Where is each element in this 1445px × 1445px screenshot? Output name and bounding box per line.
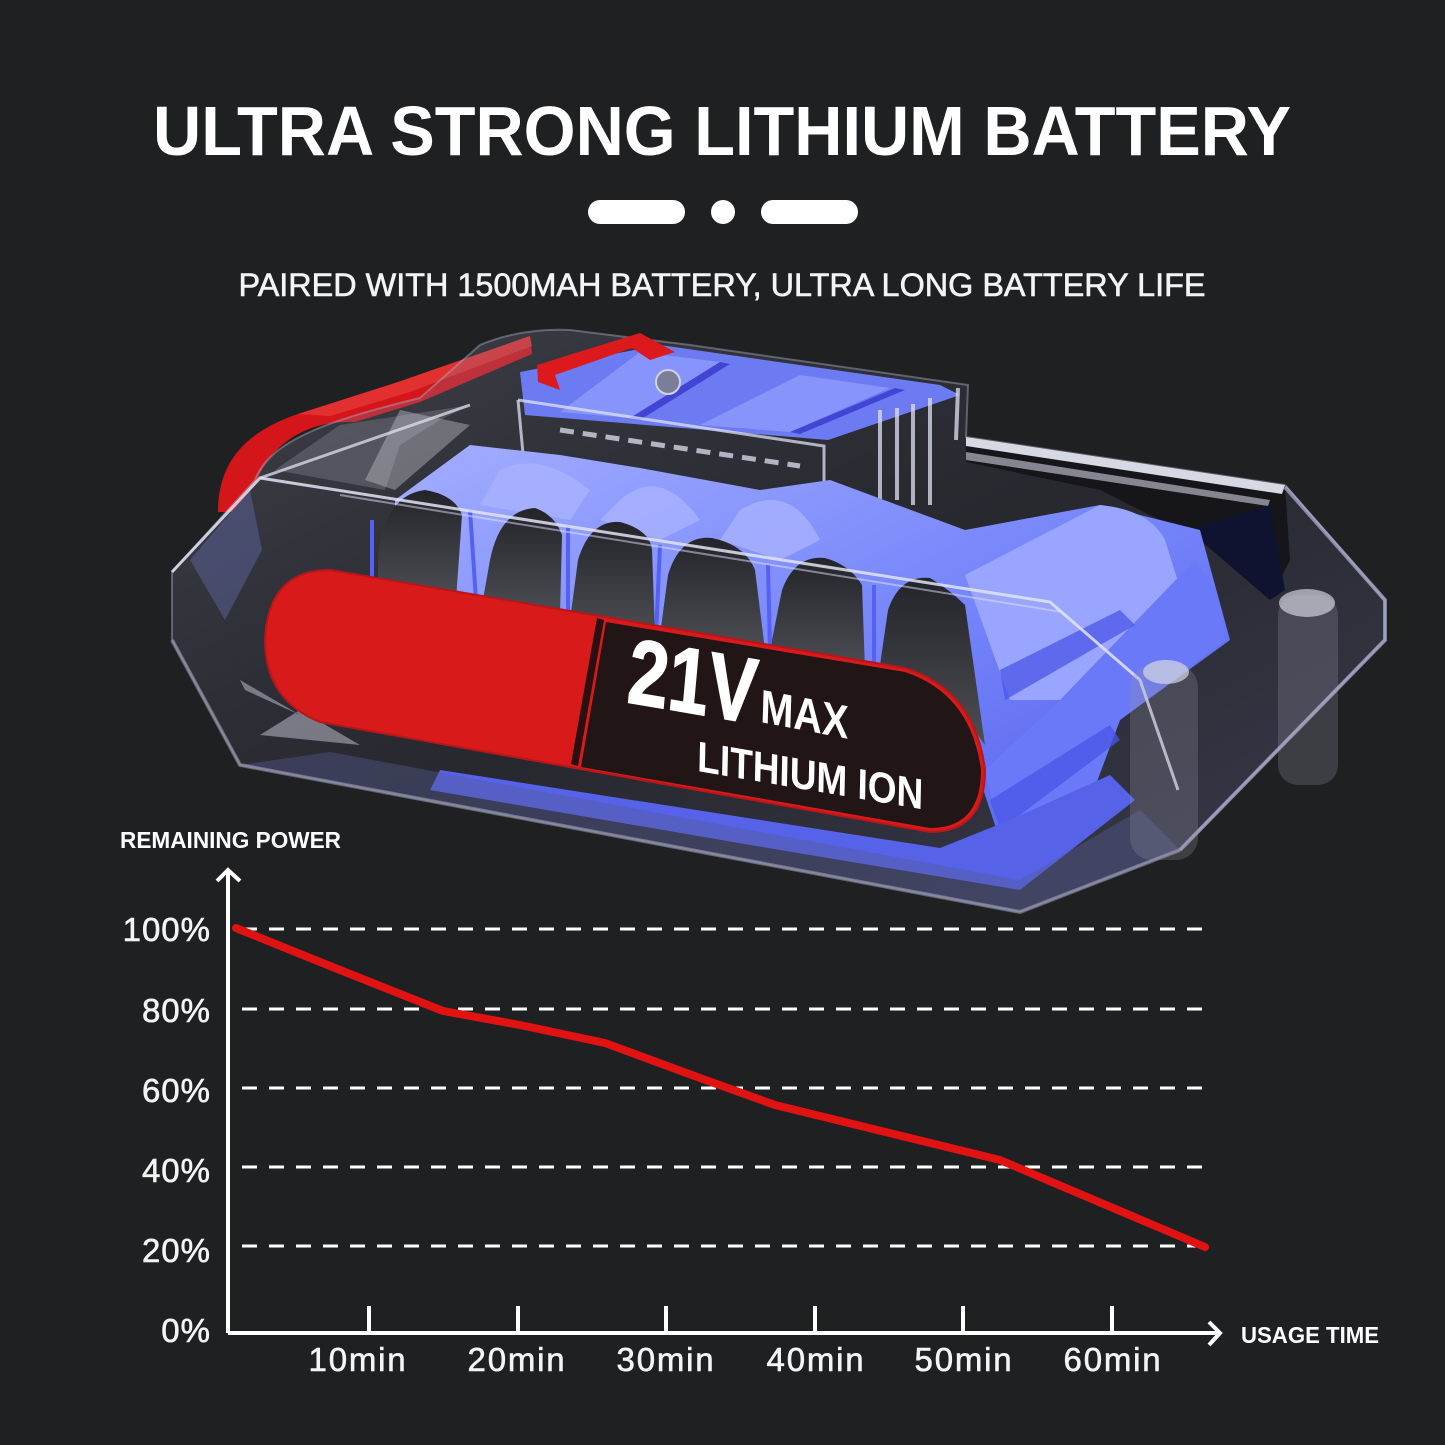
label text: 21V: 21V xyxy=(624,619,762,744)
battery: bottom blue base xyxy=(430,770,1135,890)
battery: red rear handle xyxy=(218,336,532,512)
battery: dark rear end with lettering xyxy=(966,437,1290,600)
x axis labels: 50min xyxy=(915,1341,1013,1378)
battery: top housing struts and contacts xyxy=(260,388,958,520)
x axis labels: 30min xyxy=(617,1341,715,1378)
y axis labels: 0% xyxy=(161,1312,211,1349)
battery: six dark cell ends xyxy=(378,490,985,745)
subtitle: PAIRED WITH 1500MAH BATTERY, ULTRA LONG BATTERY LIFE xyxy=(238,267,1206,303)
red discharge line xyxy=(236,928,1205,1247)
y axis labels: 40% xyxy=(142,1152,211,1189)
battery: transparent posts xyxy=(1130,589,1338,860)
title ornament: pills and dot xyxy=(588,200,858,224)
battery: front glass ledge xyxy=(172,478,1178,790)
battery: blue dividers between cells xyxy=(372,510,874,665)
y axis labels: 20% xyxy=(142,1232,211,1269)
x axis labels: 10min xyxy=(309,1341,407,1378)
y axis labels: 60% xyxy=(142,1072,211,1109)
battery: glass reflections, rear left xyxy=(275,405,470,490)
x axis labels xyxy=(309,1341,1162,1378)
label text: MAX: MAX xyxy=(760,680,850,750)
y axis title: REMAINING POWER xyxy=(120,827,341,853)
battery: red tab xyxy=(537,333,675,390)
battery: middle row cells xyxy=(395,445,1230,840)
chart: remaining power over usage time xyxy=(120,827,1379,1378)
x axis labels: 60min xyxy=(1064,1341,1162,1378)
gridlines xyxy=(242,929,1205,1246)
x axis labels: 20min xyxy=(468,1341,566,1378)
x axis title: USAGE TIME xyxy=(1241,1322,1379,1348)
x axis labels: 40min xyxy=(767,1341,865,1378)
battery: screw xyxy=(656,370,680,394)
axes with arrows and ticks xyxy=(217,870,1220,1345)
battery: rear shell xyxy=(172,330,1385,912)
title: ULTRA STRONG LITHIUM BATTERY xyxy=(153,92,1291,170)
battery: right large cells xyxy=(965,505,1190,700)
battery illustration xyxy=(172,330,1385,912)
y axis labels: 100% xyxy=(123,911,211,948)
y axis labels: 80% xyxy=(142,992,211,1029)
battery: top plate cells xyxy=(520,345,960,440)
y axis labels xyxy=(123,911,211,1349)
label text: LITHIUM ION: LITHIUM ION xyxy=(697,733,924,819)
battery: label xyxy=(265,570,985,832)
